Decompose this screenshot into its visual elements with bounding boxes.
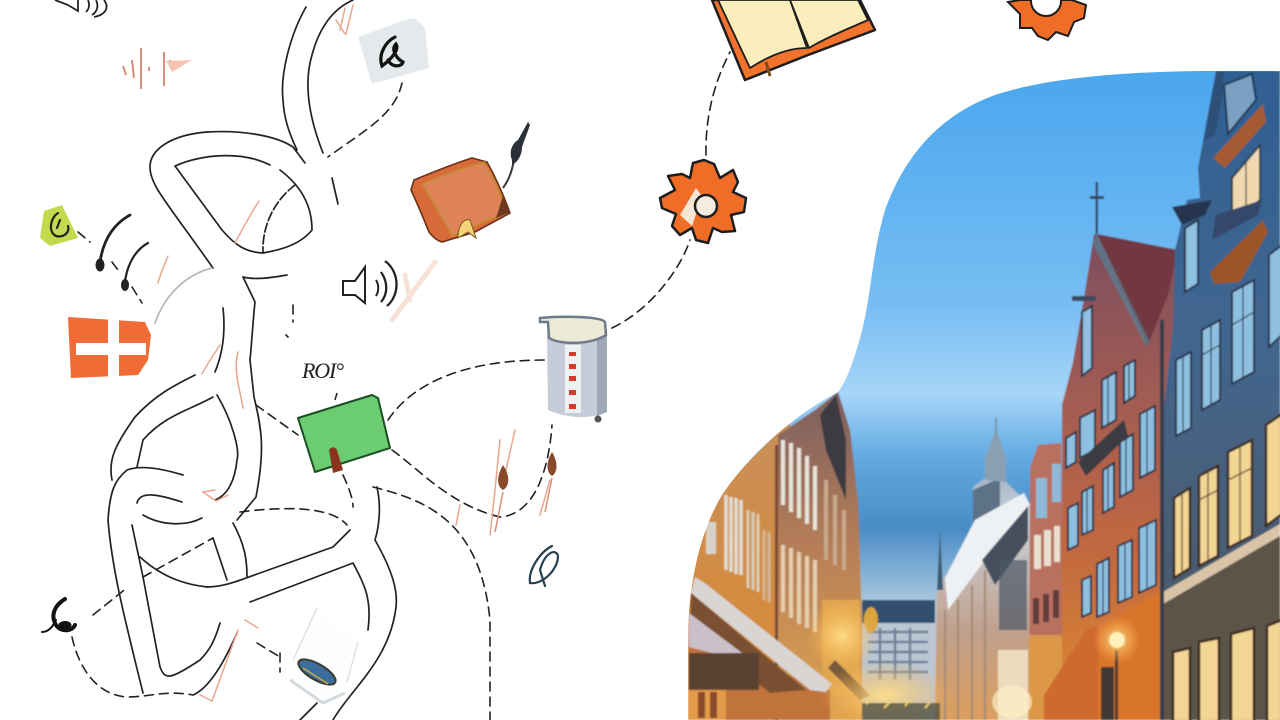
orange building, far left <box>688 420 790 720</box>
icon: black squiggle, bottom left <box>42 599 75 632</box>
icon: brown drop pins <box>495 452 556 532</box>
pink building <box>1029 443 1064 720</box>
white church and tower <box>935 418 1032 720</box>
icon: orange gear, centre right <box>660 160 746 243</box>
faint red sketch strokes <box>158 5 550 701</box>
icon: open book <box>712 0 875 80</box>
photo: evening street in a blob-shaped frame <box>680 60 1280 720</box>
icon: green wallet with red tab <box>298 393 390 473</box>
tan tall building <box>778 392 878 720</box>
distant building at end of the street <box>860 600 938 720</box>
striped awnings and shop fronts <box>688 577 870 720</box>
icon: brown wallet with plug cable <box>411 122 530 242</box>
icon: orange flag with white cross <box>68 317 151 378</box>
maze of looping outlined roads <box>108 0 396 720</box>
icon: orange gear, cropped at top <box>1008 0 1086 40</box>
red brick building with dark roof <box>1044 182 1180 720</box>
blue-grey building, right <box>1160 71 1280 720</box>
icon: glass card with blue oval <box>290 608 359 703</box>
icon: small teal squiggle <box>530 546 558 586</box>
icon: sound waveform <box>123 48 192 89</box>
icon: grey note card with glyph <box>358 18 429 84</box>
shop front with ribbed cladding <box>1163 534 1280 720</box>
icon: grey bucket with red dots <box>540 317 607 422</box>
street glow and crowd <box>819 661 1032 720</box>
icon: lime sticky note <box>40 205 78 246</box>
icon: two curved brush strokes <box>96 215 148 290</box>
dashed route lines between icons <box>72 52 730 720</box>
label: handwritten ROI: ROI° <box>301 358 344 383</box>
icon: speaker, top left <box>55 0 107 17</box>
sky <box>680 60 1280 620</box>
icon: speaker, centre <box>343 261 397 306</box>
